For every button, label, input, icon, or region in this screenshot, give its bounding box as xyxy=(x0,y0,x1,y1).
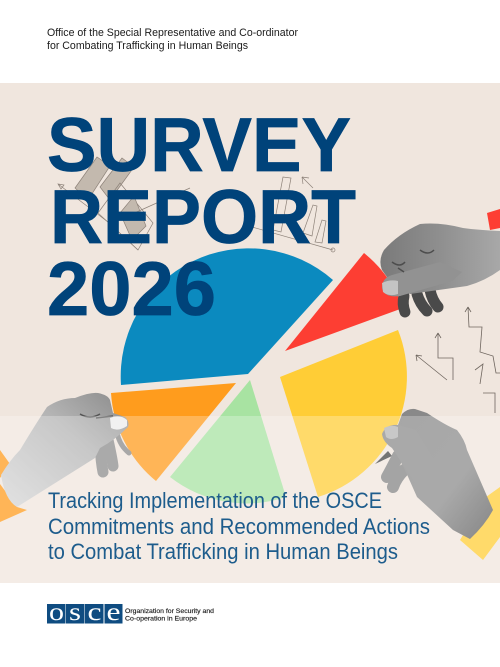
title: 2026 xyxy=(47,247,216,332)
pie slice: red xyxy=(285,253,403,351)
hand: upper right xyxy=(380,224,500,312)
fingers xyxy=(375,451,392,464)
thumb nail xyxy=(382,280,398,295)
header text xyxy=(47,27,298,52)
logo letters: s xyxy=(69,599,81,626)
logo wordmark xyxy=(125,609,214,622)
logo wordmark: Organization for Security and xyxy=(125,609,214,615)
knuckle creases xyxy=(392,250,434,272)
pie slice: yellow xyxy=(280,330,407,497)
thumb nail xyxy=(110,416,127,430)
subtitle: Tracking Implementation of the OSCE xyxy=(48,488,382,513)
header text: Office of the Special Representative and Co-ordinator xyxy=(47,27,298,39)
thumb xyxy=(382,262,462,296)
logo tiles xyxy=(47,604,122,624)
sleeve: left orange xyxy=(0,450,27,522)
pie slice: blue xyxy=(121,248,333,385)
knuckle creases xyxy=(80,414,113,418)
hand: lower right xyxy=(375,409,493,539)
sleeve: right yellow xyxy=(460,487,500,560)
subtitle xyxy=(48,488,430,564)
subtitle: to Combat Trafficking in Human Beings xyxy=(48,539,398,564)
sketch: arrows right xyxy=(416,307,500,413)
sleeve: upper right red xyxy=(487,209,500,230)
palm xyxy=(392,409,493,539)
fingers xyxy=(100,440,113,472)
sketch: rising bar chart left xyxy=(58,157,335,252)
title: REPORT xyxy=(50,175,356,260)
logo letters: c xyxy=(88,599,102,626)
pie slice: green xyxy=(170,380,286,503)
thumb xyxy=(382,425,440,490)
header text: for Combating Trafficking in Human Beings xyxy=(47,40,248,52)
pie slice: orange xyxy=(111,383,236,481)
hand: lower left xyxy=(1,393,129,507)
background panel xyxy=(0,83,500,583)
palm xyxy=(380,224,500,294)
palm xyxy=(1,393,129,507)
logo letters xyxy=(49,599,120,626)
OSCE logo xyxy=(47,599,214,626)
logo letters: o xyxy=(49,599,64,626)
title: SURVEY xyxy=(47,103,351,188)
logo letters: e xyxy=(106,599,120,626)
title xyxy=(47,103,356,332)
subtitle: Commitments and Recommended Actions xyxy=(48,514,430,539)
logo wordmark: Co-operation in Europe xyxy=(125,616,198,622)
lower light band xyxy=(0,416,500,583)
thumb nail xyxy=(384,426,398,439)
fingers xyxy=(403,290,438,312)
